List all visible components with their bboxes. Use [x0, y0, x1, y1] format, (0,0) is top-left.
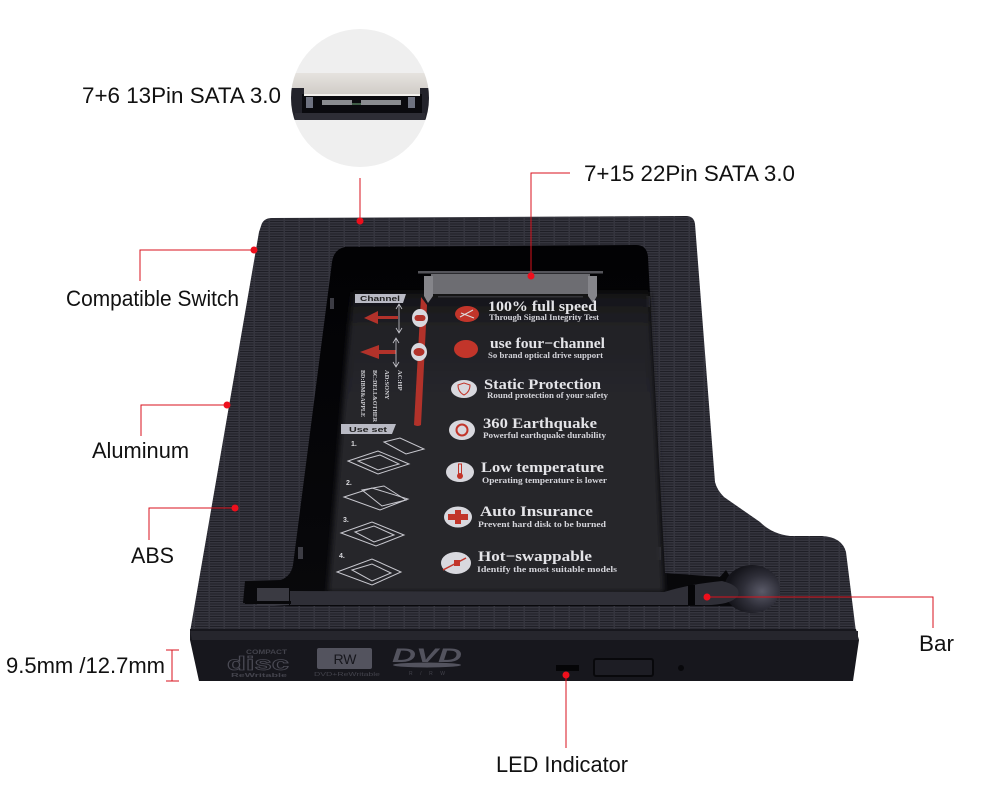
callout: LED indicator: [496, 672, 628, 777]
callout: bar: [704, 594, 954, 656]
install steps diagrams: 2.: [346, 480, 352, 487]
install steps diagrams: [337, 438, 424, 585]
callout: aluminum: Aluminum: [92, 438, 189, 463]
caddy body: [190, 216, 859, 681]
feature: 100% full speed: [455, 299, 599, 322]
channel brand list: AC:HP: [396, 370, 403, 391]
callout: compatible switch: [66, 246, 258, 311]
callout: ABS: ABS: [131, 543, 174, 568]
callout: 22-pin SATA: [528, 161, 795, 280]
callout: 22-pin SATA: 7+15 22Pin SATA 3.0: [584, 161, 795, 186]
channel brand list: AD:SONY: [383, 370, 390, 400]
zoom circle: 13-pin SATA connector close-up: [291, 29, 429, 167]
callout: compatible switch: Compatible Switch: [66, 286, 239, 311]
channel brand list: BD:IBM&APPLE: [359, 370, 366, 417]
feature: hot-swappable: Identify the most suitable models: [477, 565, 617, 574]
DVD logo: [392, 646, 462, 677]
feature: 360 earthquake: Powerful earthquake durability: [483, 431, 606, 440]
callout: 13-pin SATA: 7+6 13Pin SATA 3.0: [82, 83, 281, 108]
channel selector badges: [411, 309, 428, 361]
callout: ABS: [131, 504, 238, 568]
feature: auto insurance: Auto Insurance: [480, 504, 593, 520]
install steps diagrams: 3.: [343, 517, 349, 524]
use set tag: [341, 424, 396, 434]
feature: auto insurance: [444, 504, 607, 529]
channel tag: Channel: [360, 294, 400, 303]
callout: LED indicator: LED Indicator: [496, 752, 628, 777]
compact disc logo: [227, 650, 290, 679]
feature: auto insurance: Prevent hard disk to be burned: [478, 520, 607, 529]
front panel: [190, 629, 859, 681]
callout: aluminum: [92, 402, 230, 463]
feature: low temperature: [446, 460, 608, 485]
feature: hot-swappable: Hot−swappable: [478, 549, 592, 565]
knob: [724, 565, 780, 613]
feature: static protection: [451, 377, 608, 400]
channel brand list: [359, 370, 403, 422]
DVD logo: R / R W: [409, 671, 445, 677]
feature: static protection: Static Protection: [484, 377, 602, 393]
feature: use four-channel: So brand optical drive support: [488, 351, 603, 360]
eject button: [594, 659, 653, 676]
red channel strip: [414, 297, 427, 426]
LED slot: [556, 665, 579, 671]
RW logo: [314, 648, 380, 678]
compact disc logo: disc: [227, 654, 290, 675]
feature: 100% full speed: 100% full speed: [488, 299, 598, 315]
feature: static protection: Round protection of your safety: [487, 391, 608, 400]
textured frame: [190, 216, 856, 632]
printed label panel: [328, 271, 664, 592]
feature: hot-swappable: [441, 549, 617, 574]
callout: bar: Bar: [919, 631, 954, 656]
callout: thickness: 9.5mm /12.7mm: [6, 653, 165, 678]
DVD logo: DVD: [392, 646, 462, 667]
feature: 360 earthquake: [449, 416, 606, 440]
use set tag: Use set: [349, 425, 388, 434]
feature: use four-channel: [454, 336, 605, 360]
install steps diagrams: 4.: [339, 553, 345, 560]
compact disc logo: COMPACT: [246, 650, 287, 656]
channel tag: [355, 294, 406, 303]
side clips: [298, 296, 661, 560]
SATA 22-pin connector: [418, 271, 603, 303]
channel brand list: BC:DELL&OTHER: [371, 370, 378, 422]
feature: low temperature: Operating temperature is lower: [482, 476, 608, 485]
RW logo: DVD+ReWritable: [314, 672, 380, 678]
inner window: [243, 245, 738, 606]
pin hole: [678, 665, 684, 671]
feature: use four-channel: use four−channel: [490, 336, 605, 352]
feature: 360 earthquake: 360 Earthquake: [483, 416, 597, 432]
RW logo: RW: [333, 651, 357, 667]
bar: [290, 581, 739, 605]
feature: low temperature: Low temperature: [481, 460, 604, 476]
feature: 100% full speed: Through Signal Integrity Test: [489, 313, 599, 322]
left latch: [245, 588, 291, 605]
callout: 13-pin SATA: [82, 83, 364, 224]
install steps diagrams: 1.: [351, 441, 357, 448]
channel arrows: [360, 304, 402, 367]
compact disc logo: ReWritable: [231, 673, 287, 679]
